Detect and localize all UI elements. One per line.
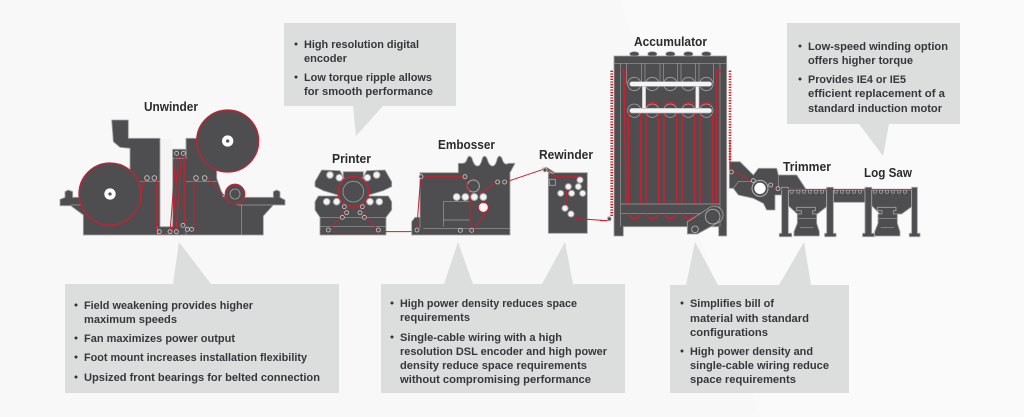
panel: accumulator and trimmer callout: material with standard [690,313,809,325]
panel: log saw callout [787,23,960,156]
machine: embosser [412,156,543,235]
panel: accumulator and trimmer callout: Simplifies bill of [690,298,774,310]
heading: Rewinder: Rewinder [539,148,593,162]
panel: embosser and rewinder callout: Single-cable wiring with a high [400,332,562,344]
panel: embosser and rewinder callout: without compromising performance [399,374,591,386]
panel: unwinder callout: Foot mount increases installation flexibility [84,352,307,364]
panel: unwinder callout [65,242,339,393]
panel: accumulator and trimmer callout: configurations [690,327,768,339]
panel: printer callout: Low torque ripple allows [304,72,432,84]
heading: Printer: Printer [332,152,371,166]
panel: printer callout: encoder [304,53,348,65]
heading: Embosser: Embosser [438,138,495,152]
heading: Log Saw: Log Saw [864,166,912,180]
machine: trimmer and log saw [729,140,920,237]
machine: unwinder [60,110,285,235]
panel: printer callout [284,23,456,136]
panel: accumulator and trimmer callout: High power density and [690,346,813,358]
panel: printer callout: High resolution digital [304,39,419,51]
panel: log saw callout: efficient replacement of a [808,88,946,100]
panel: unwinder callout: Fan maximizes power output [84,333,235,345]
machine: accumulator [600,52,730,236]
panel: printer callout: for smooth performance [304,86,433,98]
panel: log saw callout: standard induction motor [808,103,943,115]
heading: Trimmer: Trimmer [783,160,831,174]
panel: accumulator and trimmer callout: space requirements [690,374,796,386]
panel: log saw callout: Provides IE4 or IE5 [808,74,906,86]
panel: embosser and rewinder callout [381,242,625,393]
panel: embosser and rewinder callout: requirements [400,312,470,324]
panel: log saw callout: offers higher torque [808,55,913,67]
machine: rewinder [542,167,611,233]
panel: embosser and rewinder callout: density reduce space requirements [400,360,587,372]
panel: unwinder callout: maximum speeds [84,314,177,326]
panel: accumulator and trimmer callout [670,242,849,393]
heading: Unwinder: Unwinder [144,100,198,114]
panel: unwinder callout: Upsized front bearings for belted connection [84,372,320,384]
panel: embosser and rewinder callout: High power density reduces space [400,298,577,310]
machine: printer [315,170,417,235]
panel: embosser and rewinder callout: resolution DSL encoder and high power [400,346,608,358]
panel: log saw callout: Low-speed winding option [808,41,948,53]
heading: Accumulator: Accumulator [634,35,707,49]
panel: unwinder callout: Field weakening provides higher [84,300,254,312]
panel: accumulator and trimmer callout: single-cable wiring reduce [690,360,829,372]
